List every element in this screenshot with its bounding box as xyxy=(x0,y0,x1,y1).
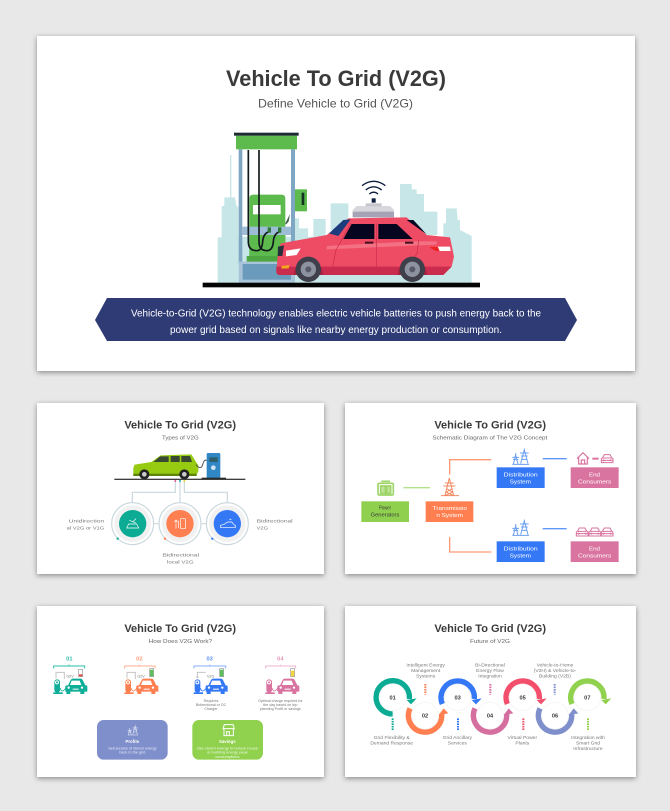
slide heading: Vehicle To Grid (V2G) xyxy=(434,420,546,432)
label 04: Bi-Directional xyxy=(475,663,505,669)
step 04 xyxy=(265,657,299,694)
box: distribution system top xyxy=(497,467,545,488)
step 04 ring xyxy=(473,702,513,732)
card: profits: back to the grid xyxy=(119,751,145,755)
step 03 ring: 03 xyxy=(455,695,461,701)
card: savings: Use stored energy to reduce house xyxy=(197,745,258,750)
step 04 ring: 04 xyxy=(487,714,494,720)
step 03 ring xyxy=(441,681,482,711)
icon: house xyxy=(577,453,589,464)
card: profits: Profits xyxy=(125,739,140,744)
label: bidirectional local xyxy=(162,552,199,566)
label: bidirectional: V2G xyxy=(257,526,268,532)
label 06: Vehicle-to-Home xyxy=(537,663,574,669)
label 02: Systems xyxy=(416,673,436,679)
label 07: Integration with xyxy=(571,735,605,741)
label: bidirectional xyxy=(257,518,293,532)
label 05 xyxy=(508,735,537,746)
step 05 ring: 05 xyxy=(520,695,526,701)
icon: generator xyxy=(378,481,393,495)
step 01: 01 xyxy=(66,657,72,663)
card: profits: Sell surplus of stored energy xyxy=(108,746,157,750)
step 02: 02 xyxy=(136,657,142,663)
connector lines xyxy=(132,481,227,503)
caption: step 04: the day based on trip xyxy=(263,703,297,707)
box: end consumers top: Consumers xyxy=(578,479,612,485)
step 07 ring xyxy=(571,681,611,711)
label 01: Demand Response xyxy=(370,740,413,746)
step 01: G2V xyxy=(66,675,74,679)
card: savings xyxy=(192,720,263,760)
label 04 xyxy=(475,663,505,679)
main subtitle: Define Vehicle to Grid (V2G) xyxy=(258,96,413,110)
label 05: Plants xyxy=(515,740,530,746)
definition banner xyxy=(95,298,577,341)
icon: pylons top xyxy=(512,449,529,464)
caption: step 04: Optimal charge required for xyxy=(258,699,303,703)
label 01: Grid Flexibility & xyxy=(374,735,410,741)
label: bidirectional: Bidirectional xyxy=(257,518,293,524)
step 03: V2G xyxy=(207,675,214,679)
label: bidirectional local: Bidirectional xyxy=(162,552,199,558)
step 06 ring xyxy=(538,702,578,732)
slide subheading: How Does V2G Work? xyxy=(149,639,212,645)
caption: step 03: Charger xyxy=(204,707,218,711)
step 07 ring: 07 xyxy=(584,695,590,701)
circle: bidirectional local xyxy=(159,503,201,545)
dotted connectors xyxy=(393,684,588,730)
label 01 xyxy=(370,735,413,746)
slide subheading: Future of V2G xyxy=(470,639,510,645)
box: power generators: Power xyxy=(379,506,391,512)
box: end consumers top xyxy=(571,467,619,488)
slide heading: Vehicle To Grid (V2G) xyxy=(124,623,236,635)
definition banner: Vehicle-to-Grid (V2G) technology enables electric vehicle batteries to push energy back to the xyxy=(131,308,541,320)
caption: step 03 xyxy=(196,699,227,711)
step 01 ring: 01 xyxy=(390,695,396,701)
card: savings: or building energy peak xyxy=(207,750,248,755)
label 05: Virtual Power xyxy=(508,735,537,741)
step 02 ring xyxy=(408,702,448,732)
definition banner: power grid based on signals like nearby energy production or consumption. xyxy=(170,324,502,336)
box: distribution system bottom xyxy=(497,541,545,562)
caption: step 03: Bidirectional or DC xyxy=(196,703,227,707)
circle: bidirectional xyxy=(206,503,248,545)
card: profits xyxy=(97,720,168,760)
label 02: Management xyxy=(411,668,441,674)
step 03: 03 xyxy=(207,657,213,663)
slide heading: Vehicle To Grid (V2G) xyxy=(124,420,236,432)
slide heading: Vehicle To Grid (V2G) xyxy=(434,623,546,635)
caption: step 04: planning Profit or savings xyxy=(260,707,301,711)
slide subheading: Schematic Diagram of The V2G Concept xyxy=(432,436,548,442)
box: end consumers bottom: Consumers xyxy=(578,553,612,559)
box: transmission system: n System xyxy=(436,513,464,519)
card: savings: Savings xyxy=(219,739,236,744)
label 06: (V2H) & Vehicle-to- xyxy=(534,668,577,674)
main title: Vehicle To Grid (V2G) xyxy=(226,66,446,91)
step 03 xyxy=(194,657,228,694)
label 04: Energy Flow xyxy=(476,668,504,674)
label: bidirectional local: local V2G xyxy=(167,560,194,566)
box: distribution system top: System xyxy=(510,479,532,485)
icon: pylons bottom xyxy=(512,520,529,535)
step 02 ring: 02 xyxy=(422,714,428,720)
icon: transmission tower xyxy=(441,478,459,496)
label 06 xyxy=(534,663,577,679)
box: end consumers top: End xyxy=(589,472,600,478)
step 02: G2V xyxy=(137,675,145,679)
icon: three cars xyxy=(576,528,613,536)
box: end consumers bottom: End xyxy=(589,546,600,552)
panel: future of V2G xyxy=(345,606,636,777)
arrows xyxy=(403,459,599,552)
label 02 xyxy=(406,663,445,679)
label 07: Infrastructure xyxy=(573,746,603,752)
label 03: Services xyxy=(448,740,467,746)
icon: blue charger xyxy=(196,453,226,479)
box: distribution system top: Distribution xyxy=(504,472,538,478)
step 04: 04 xyxy=(277,657,284,663)
slide subheading: Types of V2G xyxy=(162,436,199,442)
panel: main definition slide xyxy=(37,36,635,371)
caption: step 04 xyxy=(258,699,303,711)
label: unidirectional xyxy=(67,519,105,531)
label: unidirectional: al V2G or V1G xyxy=(67,525,104,531)
label: unidirectional: Unidirection xyxy=(69,519,105,525)
label 06: Building (V2B) xyxy=(539,673,571,679)
label 07: Smart Grid xyxy=(576,740,600,746)
box: distribution system bottom: Distribution xyxy=(504,546,538,552)
step 05 ring xyxy=(506,681,547,711)
box: distribution system bottom: System xyxy=(510,553,532,559)
box: power generators: Generators xyxy=(371,513,400,519)
label 04: Integration xyxy=(478,673,502,679)
illustration: charging station and red car xyxy=(203,133,480,287)
step 01 xyxy=(53,657,87,694)
label 02: Intelligent Energy xyxy=(406,663,445,669)
icon: green car xyxy=(133,454,198,479)
panel: schematic diagram xyxy=(345,403,636,574)
box: transmission system: Transmissio xyxy=(433,506,467,512)
caption: step 03: Requires xyxy=(204,699,218,703)
box: end consumers bottom xyxy=(571,541,619,562)
step 01 ring xyxy=(376,681,417,714)
label 03 xyxy=(443,735,473,746)
circle: unidirectional xyxy=(112,503,154,545)
label 03: Grid Ancillary xyxy=(443,735,473,741)
icon: car xyxy=(601,455,613,463)
label 07 xyxy=(571,735,605,752)
box: power generators xyxy=(361,501,409,522)
step 02 xyxy=(124,657,158,694)
step 06 ring: 06 xyxy=(552,714,558,720)
panel: types of V2G xyxy=(37,403,324,574)
panel: how does V2G work xyxy=(37,606,324,777)
card: savings: consumptions xyxy=(215,754,239,759)
box: transmission system xyxy=(426,501,473,522)
